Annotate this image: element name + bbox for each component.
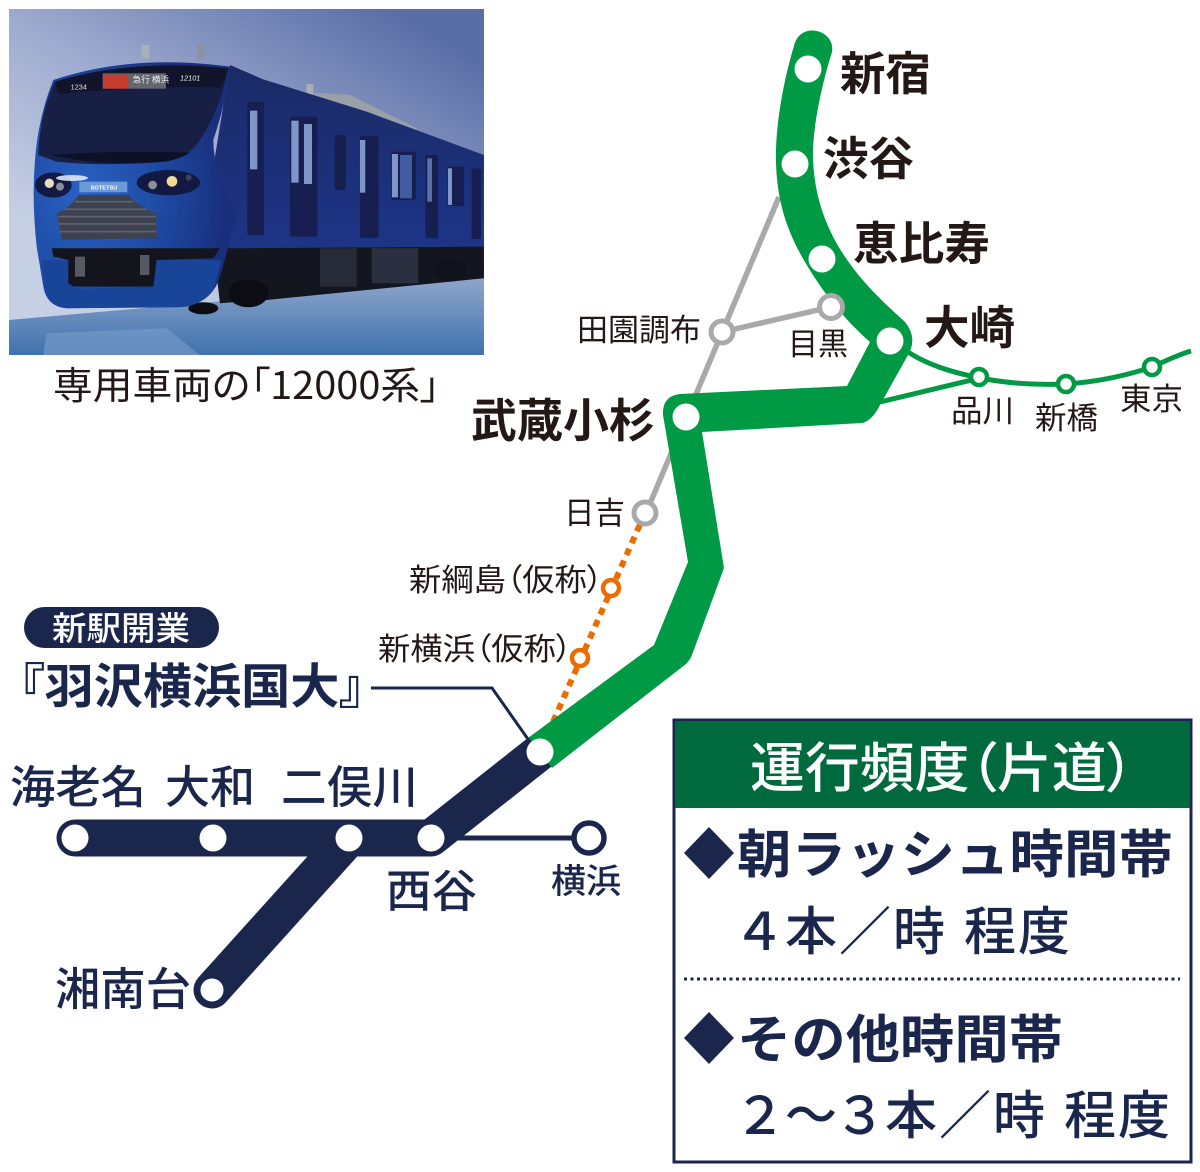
- photo: 12000 series train: 12101: [180, 74, 200, 83]
- station labels: navy line: 二俣川: [281, 762, 418, 813]
- station labels: minor: 品川: [951, 394, 1014, 429]
- rush hour heading: 朝ラッシュ時間帯: [737, 827, 1173, 885]
- emblem plate: [79, 182, 127, 192]
- roof details: [141, 45, 149, 58]
- stations: thin green: [971, 359, 1160, 392]
- station labels: minor: [378, 313, 1183, 669]
- display text: 急行 横浜: [133, 74, 170, 86]
- badge: new station opening: [24, 607, 219, 648]
- destination display: [103, 73, 166, 89]
- line: thin green branch to Tokyo: [880, 350, 1191, 402]
- stations: grey: [634, 296, 842, 524]
- underframe: [213, 245, 484, 303]
- station labels: major: 新宿: [840, 48, 931, 100]
- station labels: major: 渋谷: [823, 133, 914, 185]
- station labels: minor: 田園調布: [577, 313, 701, 348]
- station labels: major: 武蔵小杉: [471, 395, 655, 447]
- coupler: [52, 248, 220, 287]
- station labels: major: 恵比寿: [853, 218, 990, 270]
- station labels: navy line: 西谷: [386, 866, 477, 917]
- leader line: [371, 688, 530, 742]
- stations: orange: [572, 580, 619, 666]
- station labels: minor: 日吉: [564, 496, 625, 531]
- station labels: minor: 目黒: [788, 327, 848, 362]
- header text: 運行頻度（片道）: [750, 724, 1134, 803]
- stations: navy line: [62, 738, 554, 852]
- heading: Hazawa Yokohama Kokudai: 『羽沢横浜国大』: [20, 647, 364, 717]
- floor reflection: [9, 278, 484, 355]
- station labels: navy line: [10, 762, 621, 1015]
- station labels: navy line: 大和: [165, 762, 255, 813]
- upper mask band: [55, 65, 228, 94]
- line: grey connecting line: [646, 197, 831, 513]
- diamond bullet: rush: [684, 827, 734, 879]
- train light flare: [56, 175, 88, 181]
- other hours value: ２～３本／時程度: [734, 1088, 1170, 1146]
- windscreen: [38, 65, 228, 164]
- station labels: major: [471, 48, 1015, 447]
- stations: green line: [672, 56, 904, 430]
- photo: 12000 series train: 1234: [71, 82, 87, 91]
- rush hour value: ４本／時程度: [733, 904, 1070, 962]
- grille: [57, 195, 157, 240]
- station labels: navy line: 横浜: [551, 863, 621, 901]
- photo caption: 専用車両の「12000系」: [53, 355, 440, 410]
- headlights: [35, 172, 72, 198]
- line: green main: [528, 31, 912, 768]
- front body: [34, 62, 237, 308]
- station labels: minor: 新綱島（仮称）: [409, 555, 603, 600]
- station: Shonandai: [198, 976, 226, 1004]
- station labels: major: 大崎: [924, 302, 1015, 354]
- side body: [213, 65, 484, 248]
- photo: 12000 series train: SOTETSU: [91, 185, 117, 191]
- panel header: [675, 721, 1190, 808]
- station labels: navy line: 湘南台: [55, 964, 191, 1015]
- badge: new station opening: 新駅開業: [52, 610, 190, 647]
- line: orange dotted section: [553, 513, 645, 722]
- other hours heading: その他時間帯: [737, 1012, 1063, 1070]
- side doors and windows: [247, 102, 481, 239]
- station labels: navy line: 海老名: [10, 762, 146, 813]
- panel: operating frequency: [674, 720, 1191, 1162]
- station labels: minor: 新橋: [1035, 401, 1098, 436]
- diamond bullet: other: [684, 1012, 734, 1064]
- station: Yokohama: [574, 823, 604, 853]
- station labels: minor: 東京: [1120, 382, 1183, 417]
- station labels: minor: 新横浜（仮称）: [378, 624, 572, 669]
- line: navy main: [75, 752, 589, 990]
- dotted divider: [684, 978, 1180, 980]
- photo: 12000 series train: [9, 9, 484, 355]
